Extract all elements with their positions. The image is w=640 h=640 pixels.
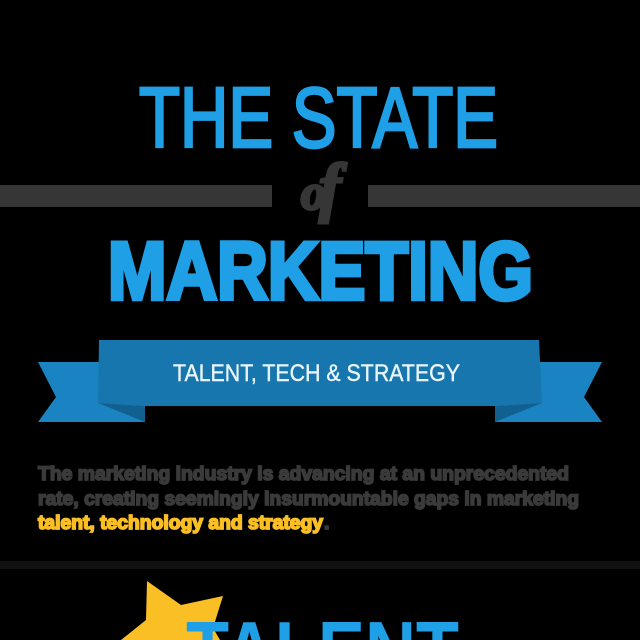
ribbon banner — [38, 340, 602, 422]
ribbon main band — [98, 340, 542, 406]
section divider — [0, 561, 640, 569]
intro line 1: The marketing industry is advancing at an unprecedented — [38, 463, 569, 485]
intro line 3 period: . — [324, 512, 329, 534]
ribbon left tail — [38, 362, 145, 422]
title: marketing: MARKETING — [108, 226, 533, 317]
ribbon right fold — [495, 403, 542, 422]
left title bar — [0, 185, 272, 207]
title: the state: THE STATE — [139, 71, 498, 166]
icon: talent star — [121, 581, 223, 640]
ribbon label: TALENT, TECH & STRATEGY — [173, 360, 460, 387]
ribbon left fold — [98, 403, 145, 422]
script word: of: o — [301, 164, 326, 220]
intro line 3 highlighted: talent, technology and strategy — [38, 512, 323, 534]
intro paragraph — [38, 463, 579, 534]
script word: of: f — [319, 151, 347, 224]
right title bar — [368, 185, 640, 207]
intro line 2: rate, creating seemingly insurmountable gaps in marketing — [38, 488, 579, 510]
ribbon right tail — [495, 362, 602, 422]
